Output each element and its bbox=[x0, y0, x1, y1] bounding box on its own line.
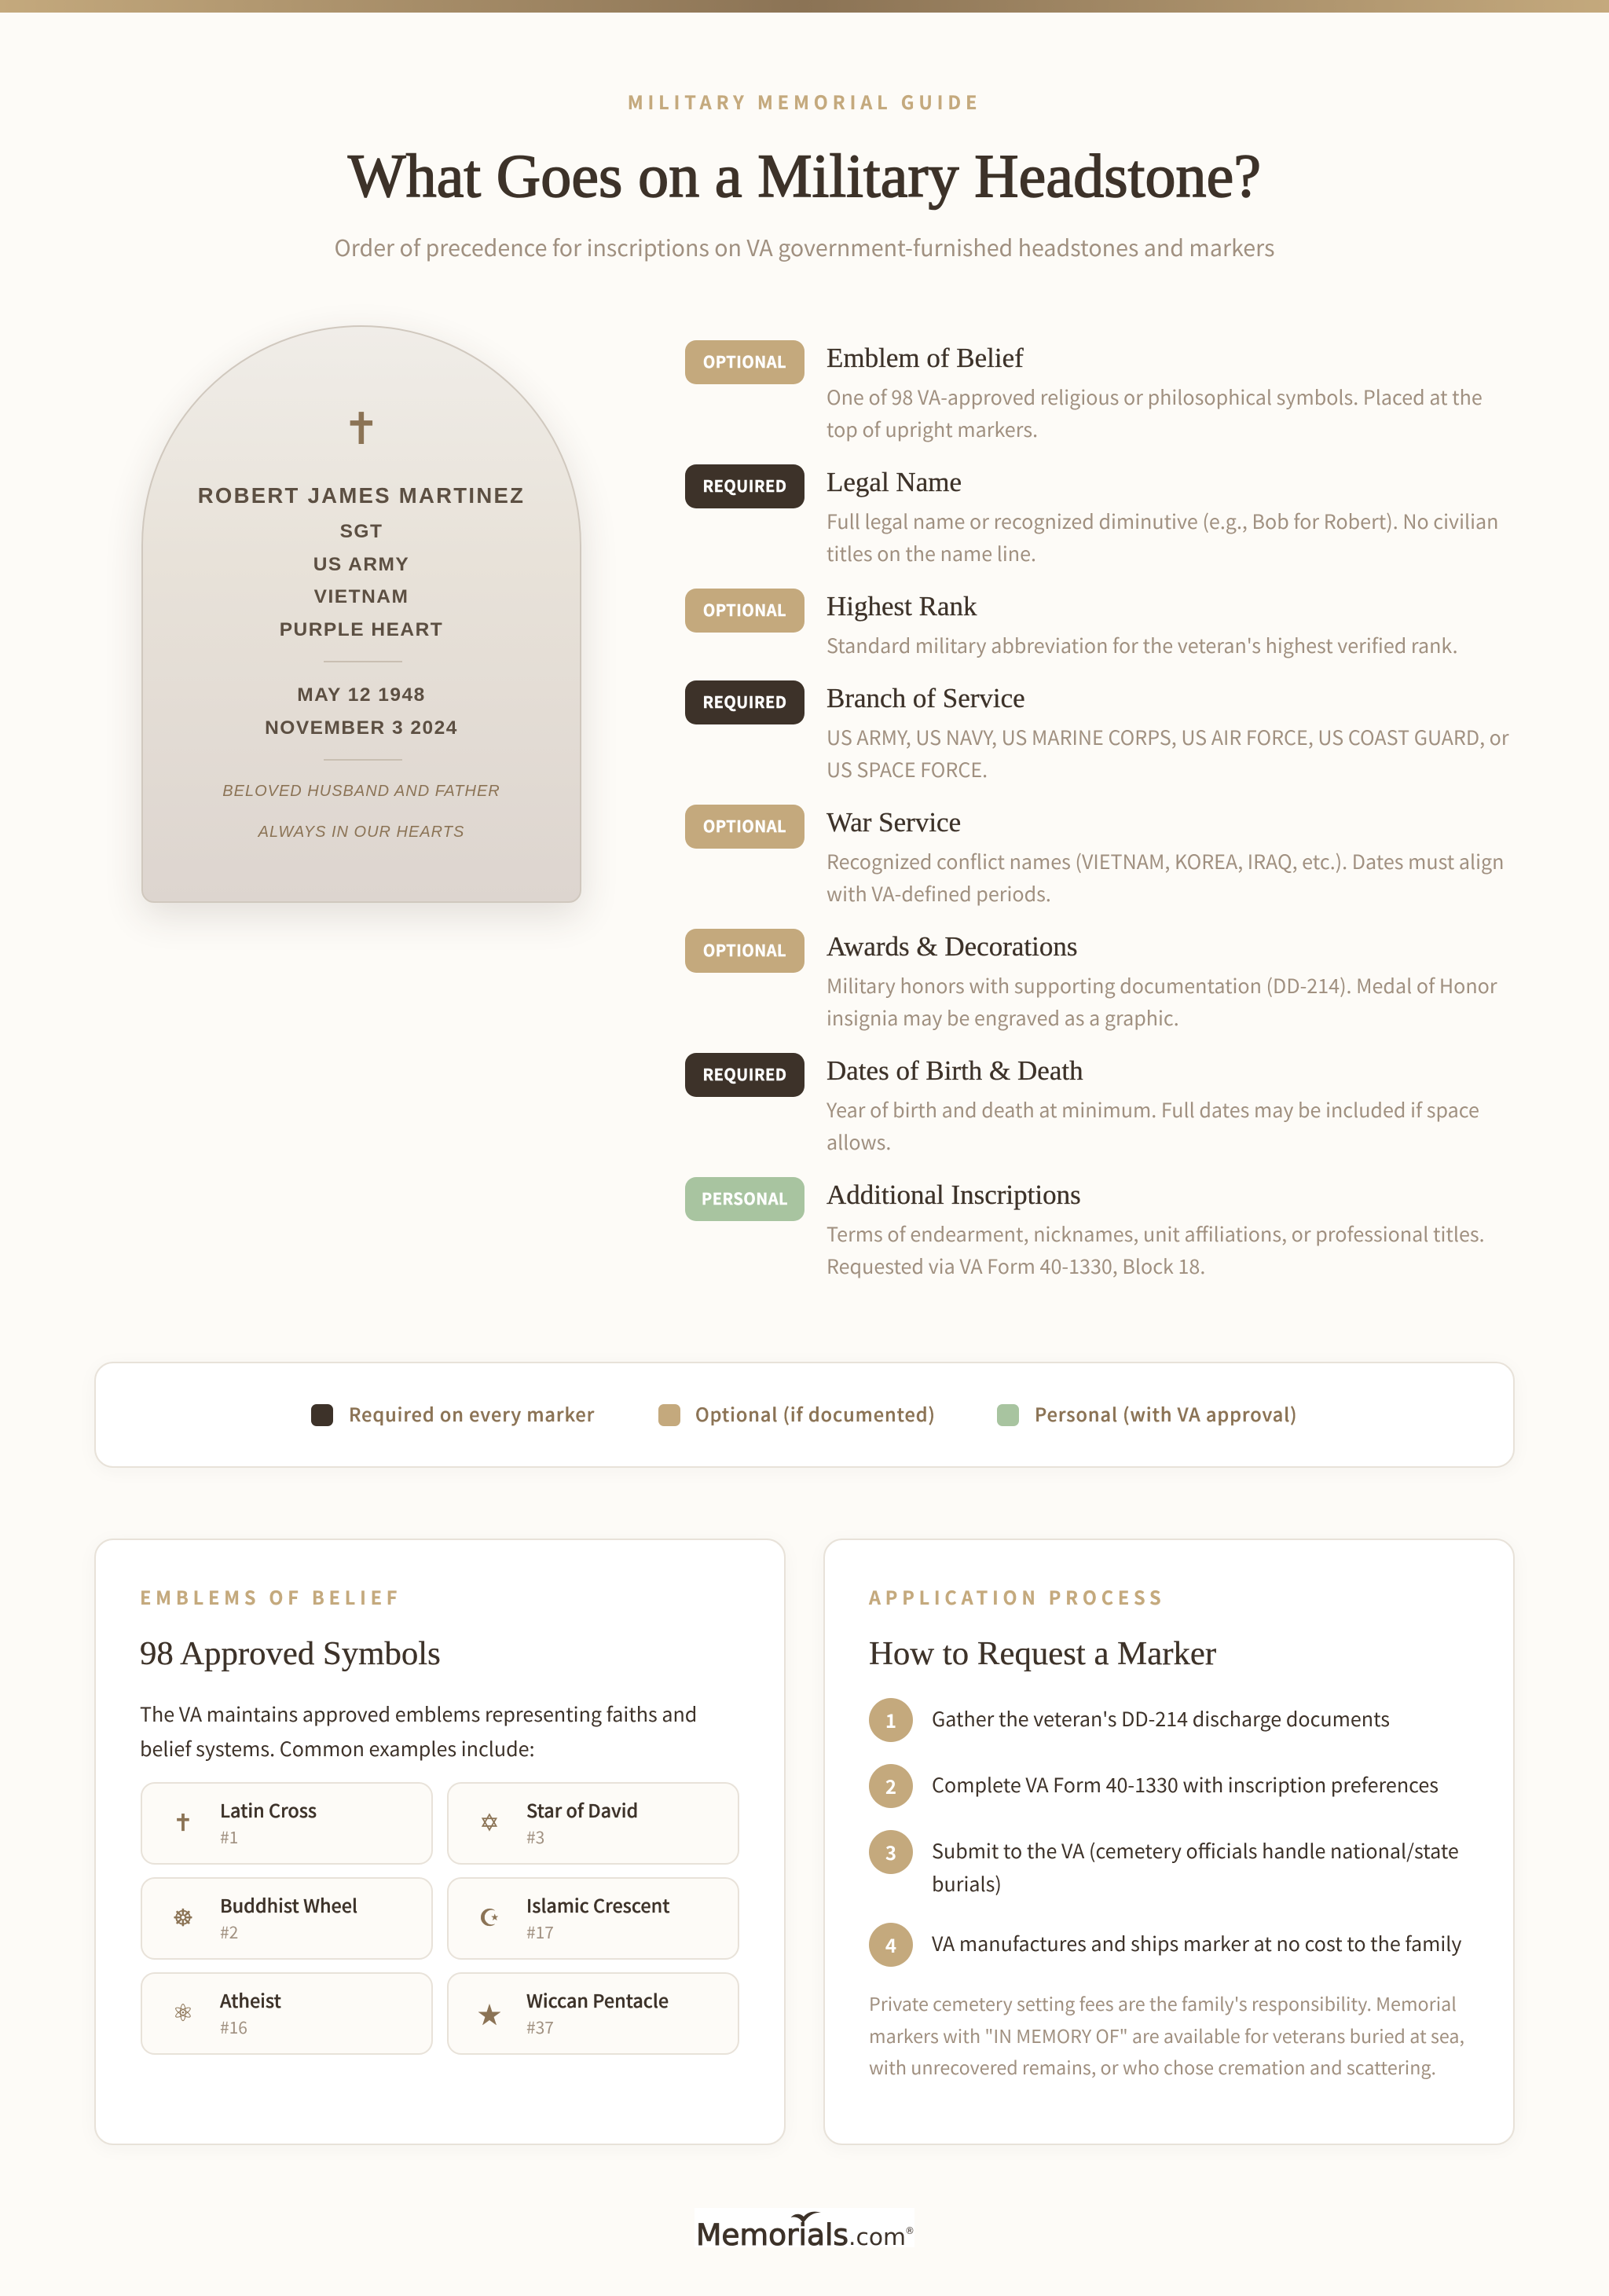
panel eyebrow: EMBLEMS OF BELIEF bbox=[140, 1583, 401, 1610]
row description bbox=[826, 1095, 1479, 1155]
panel intro text: The VA maintains approved emblems representing faiths and bbox=[140, 1699, 697, 1727]
badge: optional: OPTIONAL bbox=[703, 938, 786, 961]
row description bbox=[826, 1220, 1485, 1279]
footnote: with unrecovered remains, or who chose cremation and scattering. bbox=[869, 2053, 1436, 2080]
icon: star: ★ bbox=[478, 1996, 501, 2030]
emblem card: wiccan pentacle bbox=[447, 1972, 739, 2055]
emblem number: #16 bbox=[220, 2015, 247, 2039]
emblem card: star of david bbox=[447, 1782, 739, 1865]
badge: optional bbox=[685, 805, 804, 849]
badge: personal bbox=[685, 1177, 804, 1221]
subtitle: Order of precedence for inscriptions on VA government-furnished headstones and markers bbox=[334, 231, 1275, 262]
emblem: cross: ✝ bbox=[343, 404, 379, 455]
emblem name: Star of David bbox=[526, 1796, 638, 1823]
footnote bbox=[869, 1990, 1464, 2080]
legend label: optional: Optional (if documented) bbox=[695, 1400, 936, 1427]
legend swatch: personal bbox=[997, 1404, 1019, 1426]
row description: US ARMY, US NAVY, US MARINE CORPS, US AIR FORCE, US COAST GUARD, or bbox=[826, 723, 1509, 751]
step 3 text: burials) bbox=[932, 1869, 1002, 1898]
emblem card: buddhist wheel bbox=[141, 1877, 433, 1960]
row title: Awards & Decorations bbox=[826, 931, 1077, 962]
row: war service bbox=[685, 805, 1504, 907]
step 4 number bbox=[869, 1923, 913, 1967]
icon: atom: ⚛ bbox=[173, 2000, 193, 2027]
birth date: MAY 12 1948 bbox=[297, 684, 426, 706]
emblem card: atheist bbox=[141, 1972, 433, 2055]
icon: star of david: ✡ bbox=[479, 1810, 500, 1837]
row description: titles on the name line. bbox=[826, 539, 1036, 567]
row title: Legal Name bbox=[826, 467, 962, 497]
row description bbox=[826, 382, 1483, 443]
step 1 number: 1 bbox=[885, 1706, 896, 1733]
emblem number: #37 bbox=[526, 2015, 554, 2039]
emblem name: Atheist bbox=[220, 1986, 281, 2013]
death date: NOVEMBER 3 2024 bbox=[265, 717, 458, 739]
badge: required bbox=[685, 1053, 804, 1097]
legend label: required: Required on every marker bbox=[349, 1400, 595, 1427]
step 1 text: Gather the veteran's DD-214 discharge documents bbox=[932, 1704, 1390, 1733]
war service: VIETNAM bbox=[314, 586, 409, 607]
legend label: personal: Personal (with VA approval) bbox=[1035, 1400, 1297, 1427]
footnote: Private cemetery setting fees are the family's responsibility. Memorial bbox=[869, 1990, 1457, 2016]
row description: One of 98 VA-approved religious or philosophical symbols. Placed at the bbox=[826, 382, 1483, 410]
badge: optional bbox=[685, 929, 804, 973]
icon: crescent: ☪ bbox=[479, 1905, 500, 1932]
panel heading: 98 Approved Symbols bbox=[140, 1634, 441, 1672]
header eyebrow: MILITARY MEMORIAL GUIDE bbox=[628, 88, 981, 115]
step 1 number bbox=[869, 1698, 913, 1742]
icon: dharma wheel: ☸ bbox=[173, 1905, 193, 1932]
emblem number: #3 bbox=[526, 1825, 544, 1849]
step 3 number bbox=[869, 1830, 913, 1874]
badge: optional bbox=[685, 589, 804, 633]
badge: required: REQUIRED bbox=[702, 474, 787, 497]
panel intro text: belief systems. Common examples include: bbox=[140, 1733, 535, 1762]
row: additional inscriptions bbox=[685, 1177, 1485, 1279]
panel heading: How to Request a Marker bbox=[869, 1634, 1216, 1672]
top gradient bar bbox=[0, 0, 1609, 13]
row: awards and decorations bbox=[685, 929, 1497, 1031]
inscription line 2: ALWAYS IN OUR HEARTS bbox=[258, 823, 464, 841]
panel: application process bbox=[823, 1539, 1515, 2145]
emblem number: #1 bbox=[220, 1825, 238, 1849]
badge: personal: PERSONAL bbox=[702, 1187, 788, 1209]
row title: War Service bbox=[826, 807, 961, 838]
row description bbox=[826, 506, 1498, 567]
title: What Goes on a Military Headstone? bbox=[348, 141, 1261, 210]
panel eyebrow: APPLICATION PROCESS bbox=[869, 1583, 1165, 1610]
row description bbox=[826, 847, 1504, 907]
badge: optional: OPTIONAL bbox=[703, 598, 786, 621]
step 2 number: 2 bbox=[885, 1772, 896, 1799]
footnote: markers with "IN MEMORY OF" are available for veterans buried at sea, bbox=[869, 2022, 1464, 2048]
row: branch of service bbox=[685, 680, 1509, 783]
row description: Year of birth and death at minimum. Full dates may be included if space bbox=[826, 1095, 1479, 1124]
logo: Memorials.com: ® bbox=[905, 2225, 914, 2236]
row: emblem of belief bbox=[685, 340, 1483, 443]
legend swatch: required bbox=[311, 1404, 333, 1426]
step 3 text bbox=[932, 1836, 1459, 1898]
row description: Military honors with supporting documentation (DD-214). Medal of Honor bbox=[826, 971, 1497, 999]
badge: required: REQUIRED bbox=[702, 1062, 787, 1085]
icon: latin cross: ✝ bbox=[173, 1810, 193, 1837]
row description: top of upright markers. bbox=[826, 415, 1038, 443]
legend panel bbox=[94, 1362, 1515, 1468]
legend swatch: optional bbox=[658, 1404, 680, 1426]
panel intro text bbox=[140, 1699, 697, 1762]
logo bird bbox=[790, 2212, 821, 2224]
step 2 number bbox=[869, 1764, 913, 1808]
row title: Dates of Birth & Death bbox=[826, 1055, 1083, 1086]
emblem card: latin cross bbox=[141, 1782, 433, 1865]
emblem name: Islamic Crescent bbox=[526, 1891, 669, 1917]
panel: emblems of belief bbox=[94, 1539, 786, 2145]
step 3 text: Submit to the VA (cemetery officials handle national/state bbox=[932, 1836, 1459, 1865]
branch: US ARMY bbox=[313, 553, 409, 575]
emblem name: Wiccan Pentacle bbox=[526, 1986, 669, 2013]
badge: optional: OPTIONAL bbox=[703, 350, 786, 372]
badge: required bbox=[685, 680, 804, 724]
headstone illustration bbox=[141, 325, 581, 903]
row description: Terms of endearment, nicknames, unit affiliations, or professional titles. bbox=[826, 1220, 1485, 1248]
row title: Emblem of Belief bbox=[826, 343, 1024, 373]
row description bbox=[826, 723, 1509, 783]
row description: allows. bbox=[826, 1127, 891, 1155]
row description: US SPACE FORCE. bbox=[826, 754, 988, 783]
emblem name: Buddhist Wheel bbox=[220, 1891, 357, 1917]
row description bbox=[826, 971, 1497, 1031]
rank: SGT bbox=[340, 521, 383, 542]
row description: insignia may be engraved as a graphic. bbox=[826, 1003, 1179, 1031]
step 3 number: 3 bbox=[885, 1838, 896, 1865]
badge: optional: OPTIONAL bbox=[703, 814, 786, 837]
row description: Standard military abbreviation for the veteran's highest verified rank. bbox=[826, 630, 1458, 658]
row: legal name bbox=[685, 464, 1498, 567]
emblem card: islamic crescent bbox=[447, 1877, 739, 1960]
logo: Memorials.com bbox=[696, 2211, 914, 2247]
row: dates of birth and death bbox=[685, 1053, 1479, 1155]
badge: required: REQUIRED bbox=[702, 690, 787, 713]
row title: Additional Inscriptions bbox=[826, 1179, 1081, 1210]
step 4 number: 4 bbox=[885, 1931, 896, 1958]
badge: optional bbox=[685, 340, 804, 384]
badge: required bbox=[685, 464, 804, 508]
row title: Branch of Service bbox=[826, 683, 1025, 713]
emblem name: Latin Cross bbox=[220, 1796, 317, 1823]
emblem number: #2 bbox=[220, 1920, 238, 1944]
row: highest rank bbox=[685, 589, 1458, 658]
row title: Highest Rank bbox=[826, 591, 977, 622]
row description: Recognized conflict names (VIETNAM, KOREA, IRAQ, etc.). Dates must align bbox=[826, 847, 1504, 875]
row description: Requested via VA Form 40-1330, Block 18. bbox=[826, 1251, 1205, 1279]
row description: with VA-defined periods. bbox=[826, 878, 1051, 907]
step 4 text: VA manufactures and ships marker at no cost to the family bbox=[932, 1929, 1461, 1957]
step 2 text: Complete VA Form 40-1330 with inscription preferences bbox=[932, 1770, 1439, 1799]
veteran name: ROBERT JAMES MARTINEZ bbox=[198, 483, 525, 508]
row description: Full legal name or recognized diminutive (e.g., Bob for Robert). No civilian bbox=[826, 506, 1498, 534]
inscription line 1: BELOVED HUSBAND AND FATHER bbox=[222, 783, 500, 800]
award: PURPLE HEART bbox=[280, 619, 443, 640]
emblem number: #17 bbox=[526, 1920, 554, 1944]
